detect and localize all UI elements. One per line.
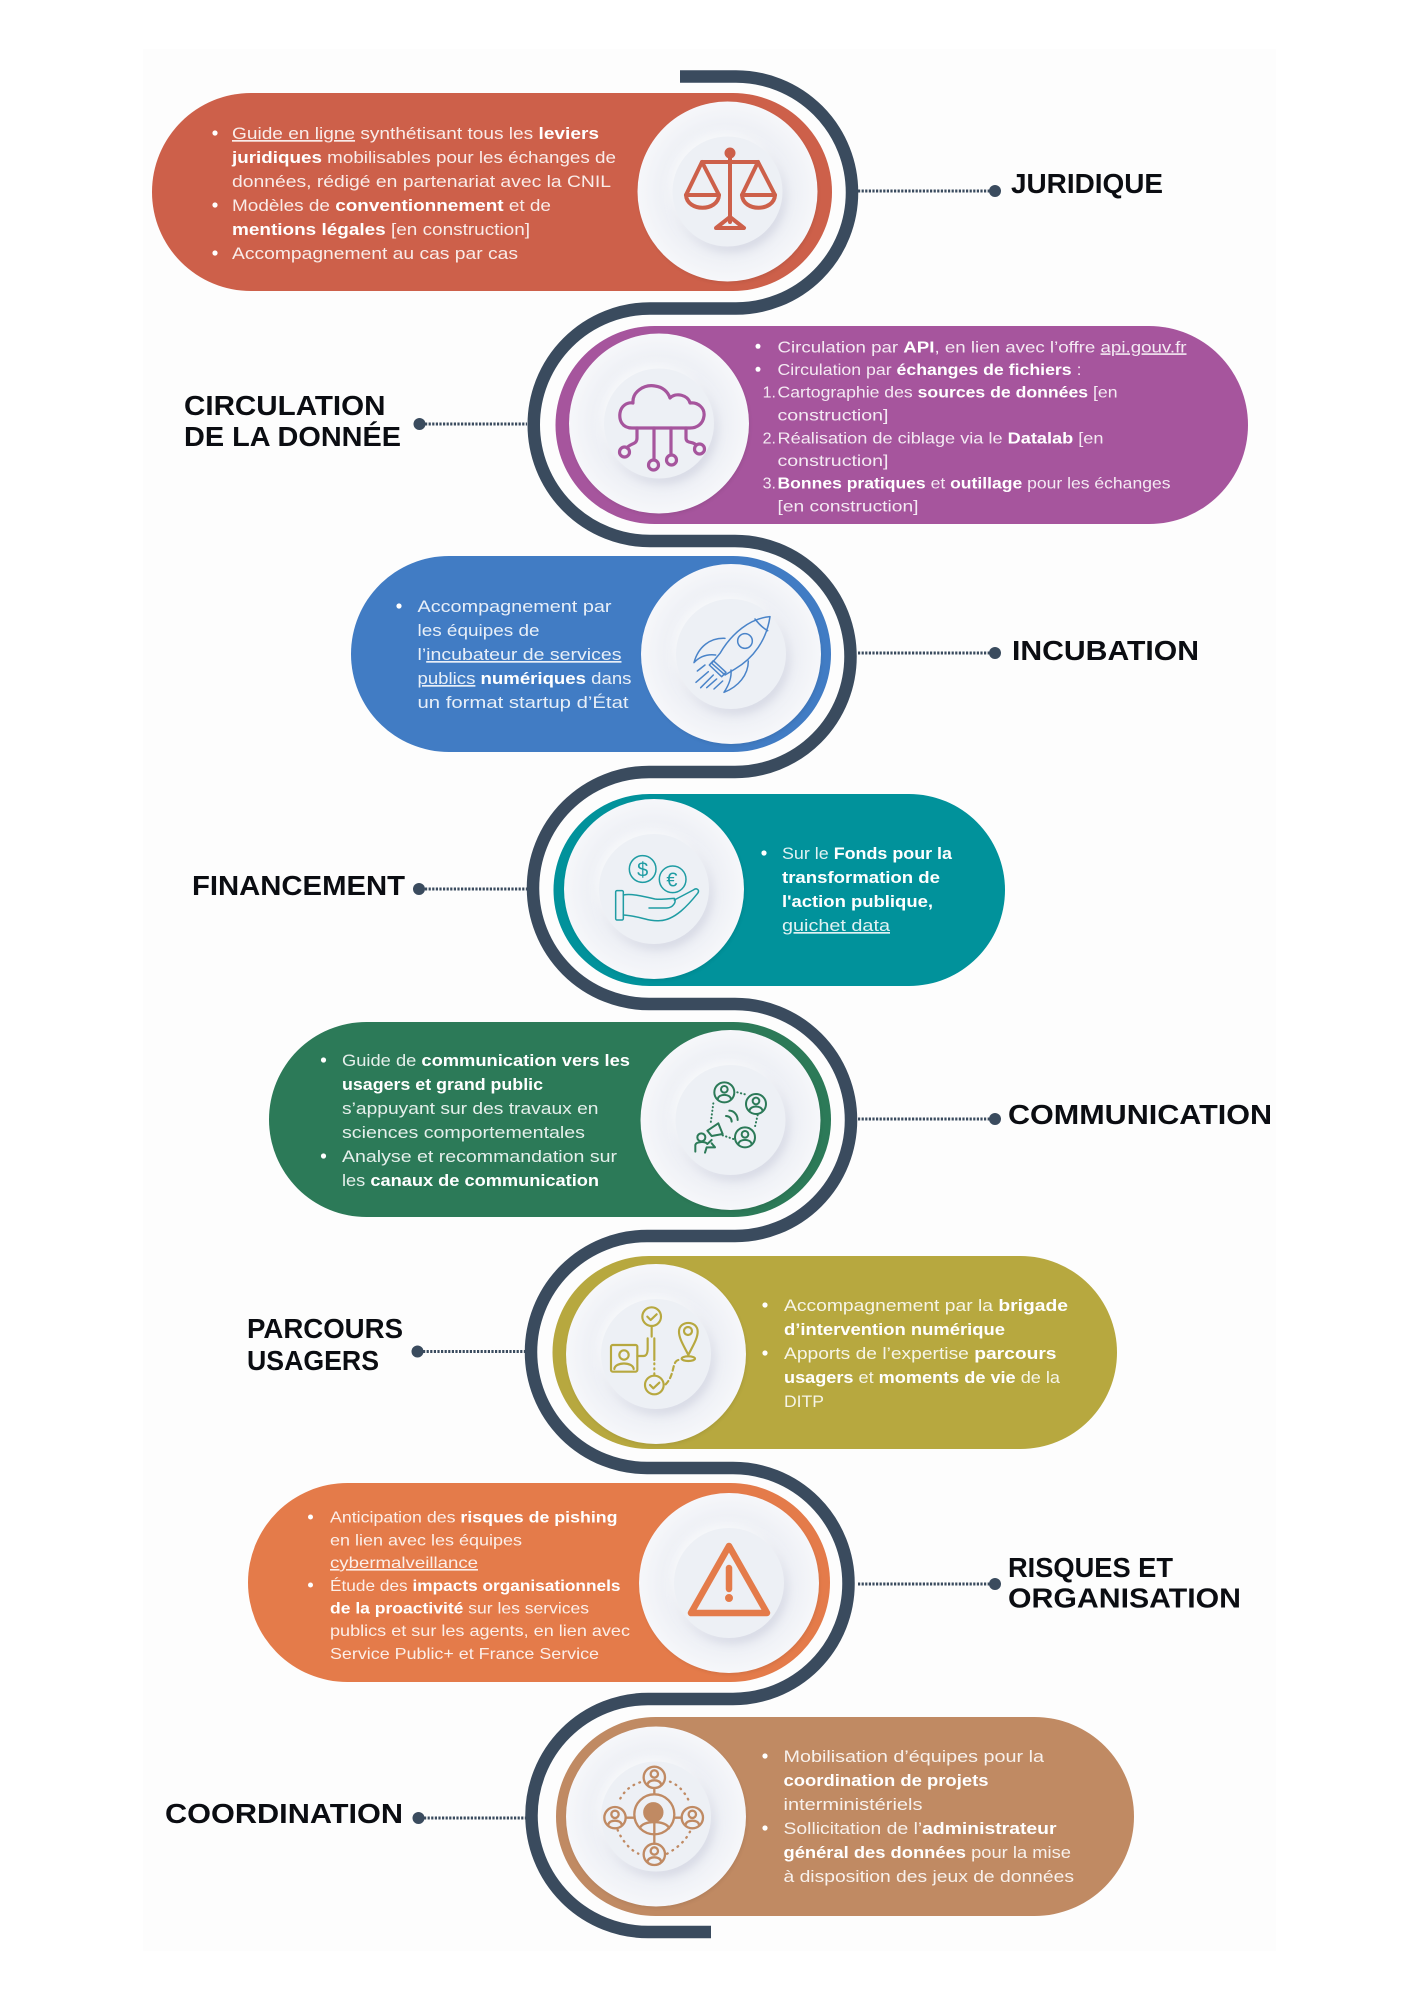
heading: parcours usagers: PARCOURS (247, 1313, 403, 1344)
panel text: 1. (763, 385, 776, 402)
icon: hand with coins (616, 856, 698, 921)
panel text (212, 124, 616, 263)
panel text: l’incubateur de services (418, 645, 622, 664)
panel text: Réalisation de ciblage via le Datalab [en (778, 430, 1104, 447)
icon: communication network (695, 1082, 766, 1153)
panel text: transformation de (782, 868, 940, 887)
panel text: usagers et moments de vie de la (784, 1368, 1061, 1387)
panel: risques et organisation (248, 1483, 830, 1682)
icon disc (569, 334, 749, 514)
pill (554, 794, 1005, 986)
panel text: Sur le Fonds pour la (782, 844, 953, 863)
panel text: mentions légales [en construction] (232, 220, 530, 239)
panel text: Apports de l’expertise parcours (784, 1344, 1056, 1363)
panel text: Modèles de conventionnement et de (232, 196, 551, 215)
icon: hand with coins: € (666, 870, 678, 892)
panel text (321, 1051, 630, 1190)
icon: scales (686, 150, 775, 228)
panel text (396, 597, 632, 712)
panel text: Circulation par API , en lien avec l’offre api.gouv.fr (778, 339, 1187, 356)
icon: warning triangle (691, 1546, 767, 1613)
panel text: les canaux de communication (342, 1171, 599, 1190)
panel: incubation (351, 556, 831, 752)
panel text: 3. (763, 476, 776, 493)
panel text: Étude des impacts organisationnels (330, 1576, 621, 1595)
icon disc (638, 102, 818, 282)
panel text: les équipes de (418, 621, 540, 640)
panel text: d’intervention numérique (784, 1320, 1005, 1339)
panel: financement (554, 794, 1005, 986)
heading: risques et organisation: ORGANISATION (1008, 1582, 1241, 1614)
icon disc (564, 799, 744, 980)
icon disc (641, 564, 821, 745)
panel: coordination (556, 1717, 1134, 1916)
panel text: Accompagnement par (418, 597, 612, 616)
panel text: Guide de communication vers les (342, 1051, 630, 1070)
panel text: à disposition des jeux de données (784, 1867, 1074, 1886)
icon disc (566, 1726, 746, 1908)
heading: incubation: INCUBATION (1012, 635, 1199, 666)
connector: incubation (858, 647, 1001, 659)
pill (351, 556, 831, 752)
connector: financement (413, 883, 527, 895)
panel text: coordination de projets (784, 1771, 988, 1790)
panel text: Bonnes pratiques et outillage pour les échanges (778, 476, 1170, 493)
panel text: données, rédigé en partenariat avec la CNIL (232, 172, 611, 191)
panel text: cybermalveillance (330, 1555, 478, 1572)
panel text: construction] (778, 453, 888, 470)
panel text: s’appuyant sur des travaux en (342, 1099, 598, 1118)
connector: juridique (858, 185, 1001, 197)
panel text (762, 1747, 1074, 1886)
panel text (308, 1510, 630, 1663)
icon: hand with coins: $ (637, 859, 648, 881)
panel text: publics et sur les agents, en lien avec (330, 1623, 630, 1640)
heading: circulation de la donnée: DE LA DONNÉE (184, 421, 401, 452)
connector: circulation (414, 418, 527, 430)
heading: parcours usagers: USAGERS (247, 1345, 379, 1376)
panel text: général des données pour la mise (784, 1843, 1071, 1862)
panel text: Accompagnement au cas par cas (232, 244, 518, 263)
panel text: Circulation par échanges de fichiers : (778, 362, 1082, 379)
icon: coordination network (604, 1767, 703, 1865)
panel text: publics numériques dans (418, 669, 632, 688)
icon disc (640, 1030, 820, 1211)
panel text: sciences comportementales (342, 1123, 585, 1142)
panel: communication (269, 1022, 831, 1217)
icon: user journey (611, 1307, 698, 1394)
pill (552, 1256, 1117, 1449)
heading: risques et organisation (1008, 1552, 1241, 1614)
pill (152, 93, 832, 291)
connector: parcours (412, 1346, 526, 1358)
panel text: juridiques mobilisables pour les échanges de (231, 148, 616, 167)
connector: coordination (412, 1812, 526, 1824)
heading: circulation de la donnée: CIRCULATION (184, 390, 386, 421)
panel text: construction] (778, 407, 888, 424)
panel text: Sollicitation de l’ administrateur (784, 1819, 1057, 1838)
panel text: interministériels (784, 1795, 922, 1814)
panel text (756, 339, 1187, 515)
heading: parcours usagers (247, 1313, 403, 1376)
background (143, 49, 1276, 1951)
panel text: Service Public+ et France Service (330, 1646, 599, 1663)
serpentine path (531, 76, 852, 1932)
icon: cloud network (620, 386, 704, 470)
panel text: DITP (784, 1392, 824, 1411)
panel text: l'action publique, (782, 892, 933, 911)
panel text: Cartographie des sources de données [en (778, 385, 1118, 402)
pill (556, 1717, 1134, 1916)
pill (556, 326, 1248, 524)
pill (269, 1022, 831, 1217)
panel text: usagers et grand public (342, 1075, 543, 1094)
panel text: en lien avec les équipes (330, 1532, 522, 1549)
panel text: Accompagnement par la brigade (784, 1296, 1068, 1315)
panel text (762, 1296, 1068, 1411)
panel text: Mobilisation d’équipes pour la (784, 1747, 1045, 1766)
panel text (761, 844, 953, 935)
heading: risques et organisation: RISQUES ET (1008, 1552, 1173, 1583)
heading: circulation de la donnée (184, 390, 401, 452)
heading: coordination: COORDINATION (165, 1798, 403, 1829)
panel text: 2. (763, 430, 776, 447)
connector: risques (858, 1578, 1001, 1590)
panel text: Guide en ligne synthétisant tous les leviers (232, 124, 599, 143)
icon: rocket (694, 617, 770, 692)
panel: juridique (152, 93, 832, 291)
panel: parcours usagers (552, 1256, 1117, 1449)
panel text: un format startup d’État (418, 693, 629, 712)
panel: circulation de la donnée (556, 326, 1248, 524)
heading: financement: FINANCEMENT (192, 870, 405, 901)
panel text: Analyse et recommandation sur (342, 1147, 617, 1166)
pill (248, 1483, 830, 1682)
panel text: guichet data (782, 916, 891, 935)
heading: juridique: JURIDIQUE (1011, 168, 1163, 199)
panel text: de la proactivité sur les services (330, 1600, 589, 1618)
icon disc (566, 1264, 746, 1445)
icon disc (639, 1493, 819, 1674)
panel text: [en construction] (778, 498, 918, 515)
panel text: Anticipation des risques de pishing (330, 1510, 618, 1527)
heading: communication: COMMUNICATION (1008, 1099, 1272, 1130)
connector: communication (858, 1113, 1001, 1125)
